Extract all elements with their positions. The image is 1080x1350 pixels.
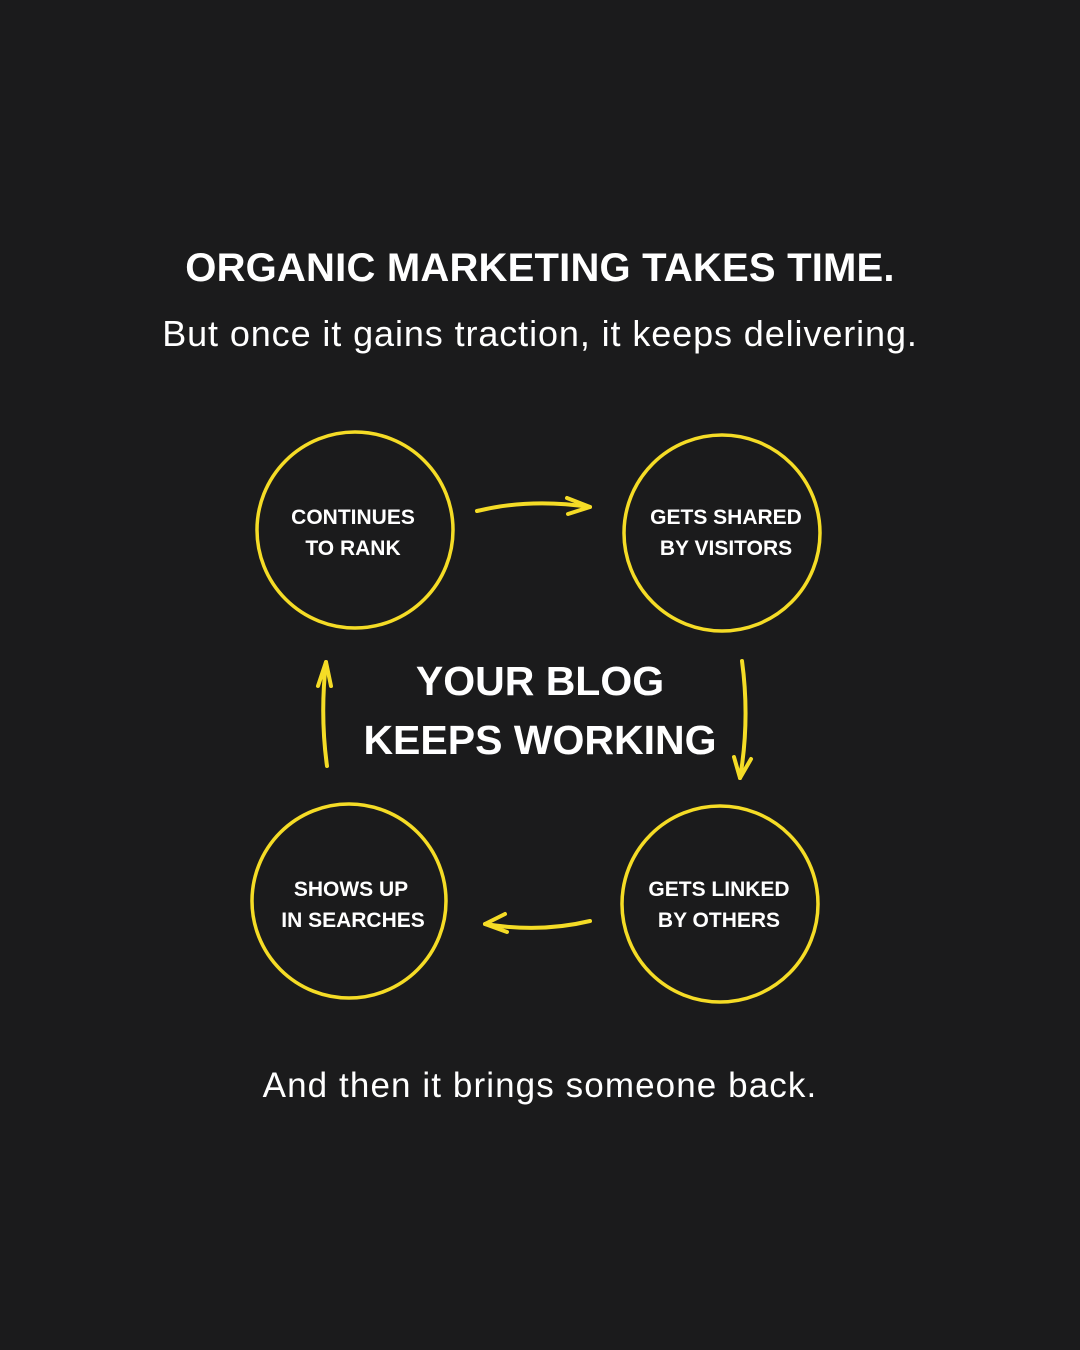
center label <box>363 658 717 763</box>
circle: continues to rank: TO RANK <box>305 537 401 560</box>
circle: shows up in searches: IN SEARCHES <box>281 909 425 932</box>
title: ORGANIC MARKETING TAKES TIME. <box>185 246 895 290</box>
arrow: left up <box>318 662 331 766</box>
circle: continues to rank <box>257 432 453 628</box>
circle: gets linked by others <box>622 806 818 1002</box>
circle: shows up in searches <box>252 804 446 998</box>
arrow: right down <box>734 661 751 778</box>
circle: gets shared by visitors: BY VISITORS <box>660 537 792 560</box>
circle: gets shared by visitors <box>624 435 820 631</box>
arrow: top right <box>477 498 590 514</box>
circle: gets linked by others: GETS LINKED <box>648 878 790 901</box>
center label: YOUR BLOG <box>416 658 664 704</box>
circle: gets shared by visitors: GETS SHARED <box>650 506 802 529</box>
footer text: And then it brings someone back. <box>263 1066 817 1105</box>
subtitle: But once it gains traction, it keeps delivering. <box>162 313 918 354</box>
center label: KEEPS WORKING <box>363 717 717 763</box>
circle: shows up in searches: SHOWS UP <box>294 878 408 901</box>
circle: continues to rank: CONTINUES <box>291 506 415 529</box>
arrow: bottom left <box>485 914 590 932</box>
circle: gets linked by others: BY OTHERS <box>658 909 780 932</box>
